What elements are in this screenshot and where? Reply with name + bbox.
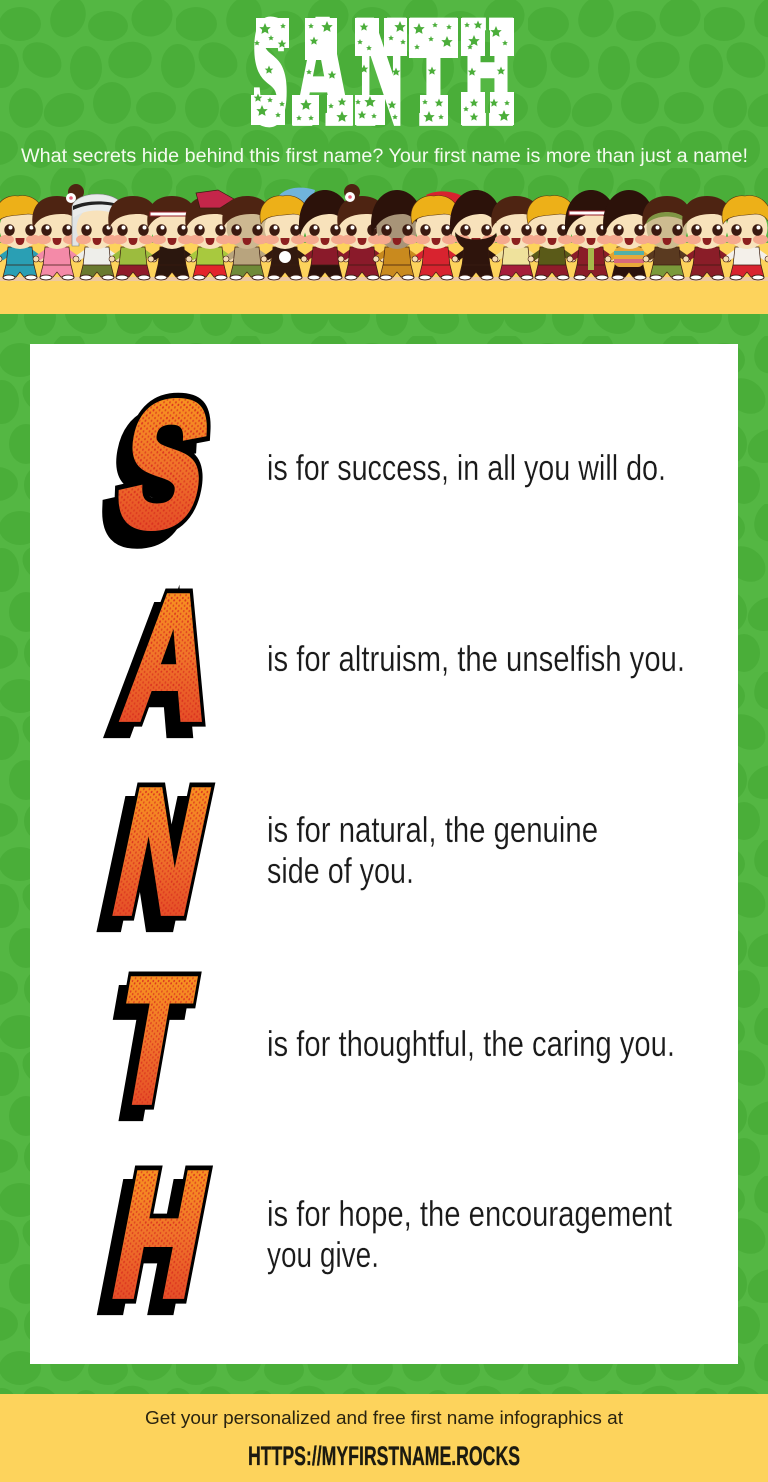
text: A line: is for altruism, the unselfish you. [267,638,685,679]
character: black dress with headband [147,196,197,280]
letter S: S [105,367,223,563]
character: maroon robe with headband [565,190,617,280]
character: blue overalls [0,196,45,280]
text: H lines: is for hope, the encouragement [267,1193,672,1234]
text: N lines: is for natural, the genuine [267,809,598,850]
letter N: N [100,753,224,949]
row of cartoon children [0,184,768,280]
letter T: T [103,943,203,1139]
letter A: A [103,571,213,768]
letter T: T [103,943,203,1139]
letter A: A [115,559,224,756]
letter T: T [103,943,203,1139]
character: red hat and skirt [185,190,235,280]
letter S: S [105,367,223,563]
footer text: Get your personalized and free first name infographics at [145,1407,623,1428]
letter N: N [87,765,211,962]
character: leaf hat, grass skirt [642,196,692,280]
text: H lines: you give. [267,1234,379,1275]
character: spotted skirt [491,196,541,280]
character: grass skirt [222,196,272,280]
letter H: H [101,1136,221,1333]
letter S: S [91,381,210,576]
character: striped poncho [603,190,655,280]
character: dark skin, ochre outfit [371,190,423,280]
title: SANTH [251,0,514,156]
character: white headscarf [72,194,123,280]
character: bun and flower, maroon [337,184,387,280]
letter H: H [101,1136,221,1333]
character: blonde, olive and maroon [527,196,577,280]
character: red dress, red cap [411,191,464,280]
character: pink kimono [32,184,84,280]
letter N: N [100,753,224,949]
footer [0,1394,768,1482]
text: S line: is for success, in all you will do. [267,447,666,488]
character: maroon robe [682,196,732,280]
character: blonde with blue cap [260,188,315,280]
footer url: HTTPS://MYFIRSTNAME.ROCKS [248,1441,520,1471]
text: H lines [267,1193,672,1275]
text: T line: is for thoughtful, the caring you. [267,1023,675,1064]
character: blonde, white and red [722,196,768,280]
title star decorations [254,20,510,122]
letter H: H [101,1136,221,1333]
letter H: H [88,1148,209,1345]
letter S: S [105,367,223,563]
character: black hair, maroon [299,190,351,280]
letter N: N [100,753,224,949]
text: N lines [267,809,598,891]
panel: white content card [30,344,738,1364]
yellow band [0,243,768,314]
character: green and maroon robe [108,196,158,280]
letter A: A [115,559,224,756]
character: black beard [450,190,502,280]
letter A: A [115,559,224,756]
text: N lines: side of you. [267,850,414,891]
subtitle: What secrets hide behind this first name? Your first name is more than just a name! [21,146,748,167]
letter T: T [93,955,192,1152]
